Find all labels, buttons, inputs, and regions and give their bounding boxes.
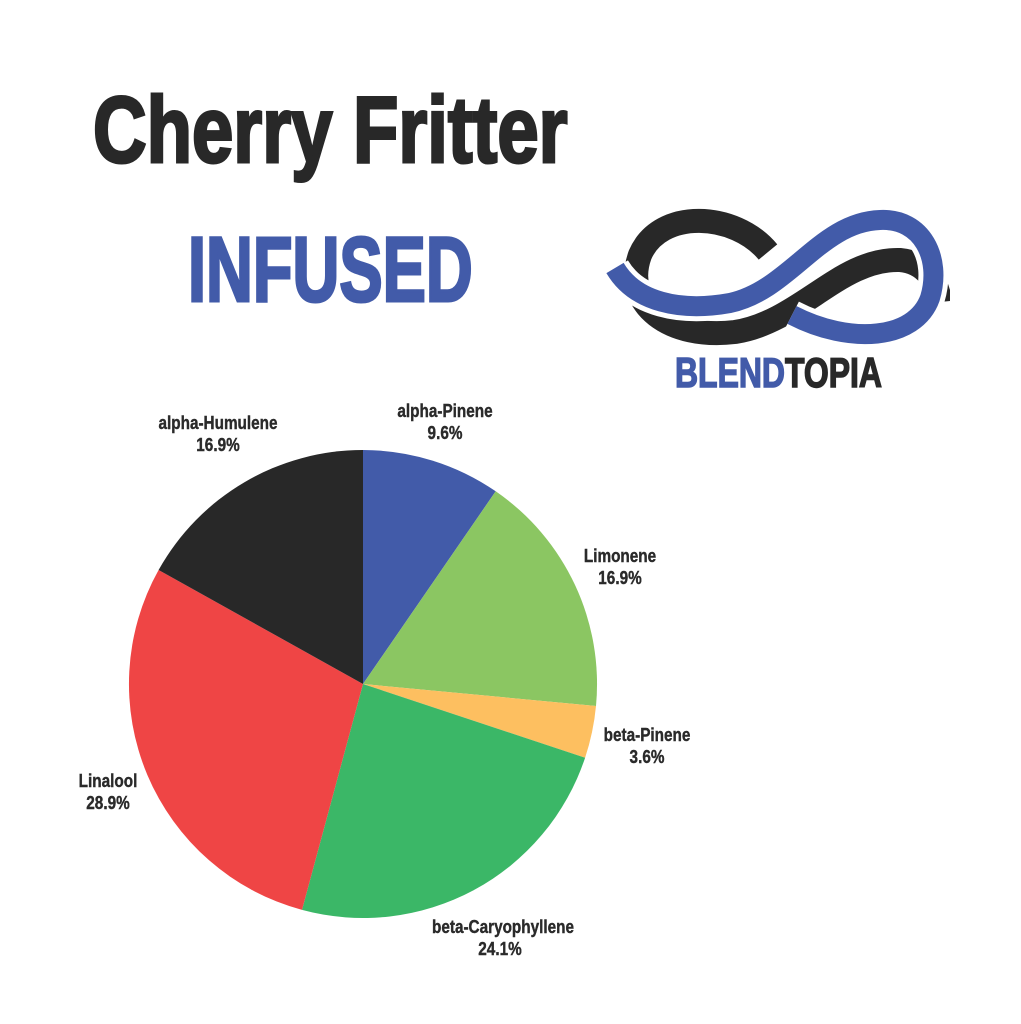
- title: Cherry Fritter: [93, 77, 568, 182]
- label: Limonene: Limonene: [584, 546, 656, 566]
- label: beta-Caryophyllene: beta-Caryophyllene: [432, 917, 574, 937]
- slice: beta-Caryophyllene: [302, 684, 585, 918]
- label: Limonene: [584, 546, 656, 588]
- label: Linalool: [79, 771, 137, 813]
- logo: blendtopia: [606, 208, 950, 396]
- label: alpha-Pinene: [397, 401, 493, 443]
- label: beta-Pinene: beta-Pinene: [604, 725, 690, 745]
- label: Limonene: 16.9%: [598, 568, 642, 588]
- logo: blendtopia: BLENDTOPIA: [675, 349, 882, 396]
- label: beta-Pinene: 3.6%: [630, 747, 664, 767]
- label: alpha-Humulene: alpha-Humulene: [158, 413, 278, 433]
- slice: beta-Pinene: [363, 684, 596, 758]
- label: alpha-Humulene: 16.9%: [196, 435, 240, 455]
- label: beta-Caryophyllene: 24.1%: [478, 939, 522, 959]
- slice: alpha-Humulene: [159, 450, 363, 684]
- label: alpha-Pinene: 9.6%: [428, 423, 462, 443]
- label: Linalool: Linalool: [79, 771, 137, 791]
- subtitle: infused: INFUSED: [188, 219, 473, 321]
- pie chart: [128, 450, 598, 918]
- slice: Limonene: [363, 491, 597, 706]
- slice: alpha-Pinene: [363, 450, 496, 684]
- slice: Linalool: [129, 570, 363, 910]
- label: alpha-Humulene: [158, 413, 278, 455]
- label: beta-Pinene: [604, 725, 690, 767]
- label: alpha-Pinene: alpha-Pinene: [397, 401, 493, 421]
- label: Linalool: 28.9%: [86, 793, 130, 813]
- label: beta-Caryophyllene: [432, 917, 574, 959]
